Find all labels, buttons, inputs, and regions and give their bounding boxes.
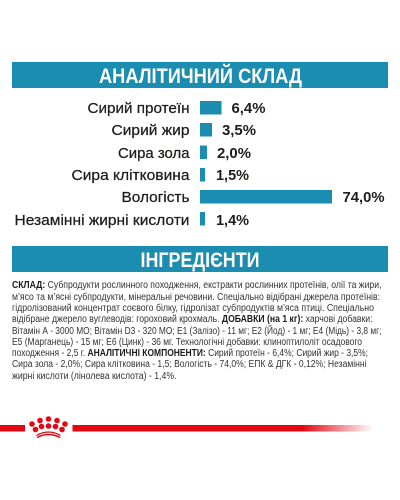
row: crude ash: 2,0% <box>217 145 251 162</box>
row: crude ash <box>118 145 251 162</box>
ingredients text block <box>12 280 382 382</box>
row: moisture: Вологість <box>122 189 190 206</box>
heading: analytical composition: АНАЛІТИЧНИЙ СКЛАД <box>99 64 302 88</box>
heading: analytical composition <box>12 62 388 88</box>
ingredients text block: відібране джерело вуглеводів: гороховий крохмаль. ДОБАВКИ (на 1 кг): харчові добавки: <box>12 314 372 325</box>
row: crude protein <box>88 100 266 117</box>
heading: ingredients <box>12 246 388 272</box>
panel: analytical composition <box>12 62 388 229</box>
row: crude ash: Сира зола <box>118 145 190 162</box>
row: essential fatty acids: Незамінні жирні кислоти <box>14 212 189 229</box>
ingredients text block: походження - 2,5 г. АНАЛІТИЧНІ КОМПОНЕНТИ: Сирий протеїн - 6,4%; Сирий жир - 3,5%; <box>12 348 368 359</box>
row: crude protein: Сирий протеїн <box>88 100 190 117</box>
row: crude fibre <box>72 167 249 184</box>
row: crude fibre: Сира клітковина <box>72 167 190 184</box>
icon: royal crown logo <box>29 416 68 438</box>
row: essential fatty acids: 1,4% <box>216 212 249 229</box>
heading: ingredients: ІНГРЕДІЄНТИ <box>140 249 260 272</box>
ingredients text block: жирні кислоти (лінолева кислота) - 1,4%. <box>12 371 176 382</box>
row: crude fat <box>112 122 256 139</box>
row: moisture <box>122 189 384 206</box>
row: crude protein: 6,4% <box>232 100 266 117</box>
panel: ingredients <box>12 246 388 382</box>
row: crude fat: 3,5% <box>222 122 256 139</box>
red brand line <box>0 425 373 432</box>
row: crude fibre: 1,5% <box>216 167 249 184</box>
row: moisture: 74,0% <box>342 189 384 206</box>
row: crude fat: Сирий жир <box>112 122 190 139</box>
